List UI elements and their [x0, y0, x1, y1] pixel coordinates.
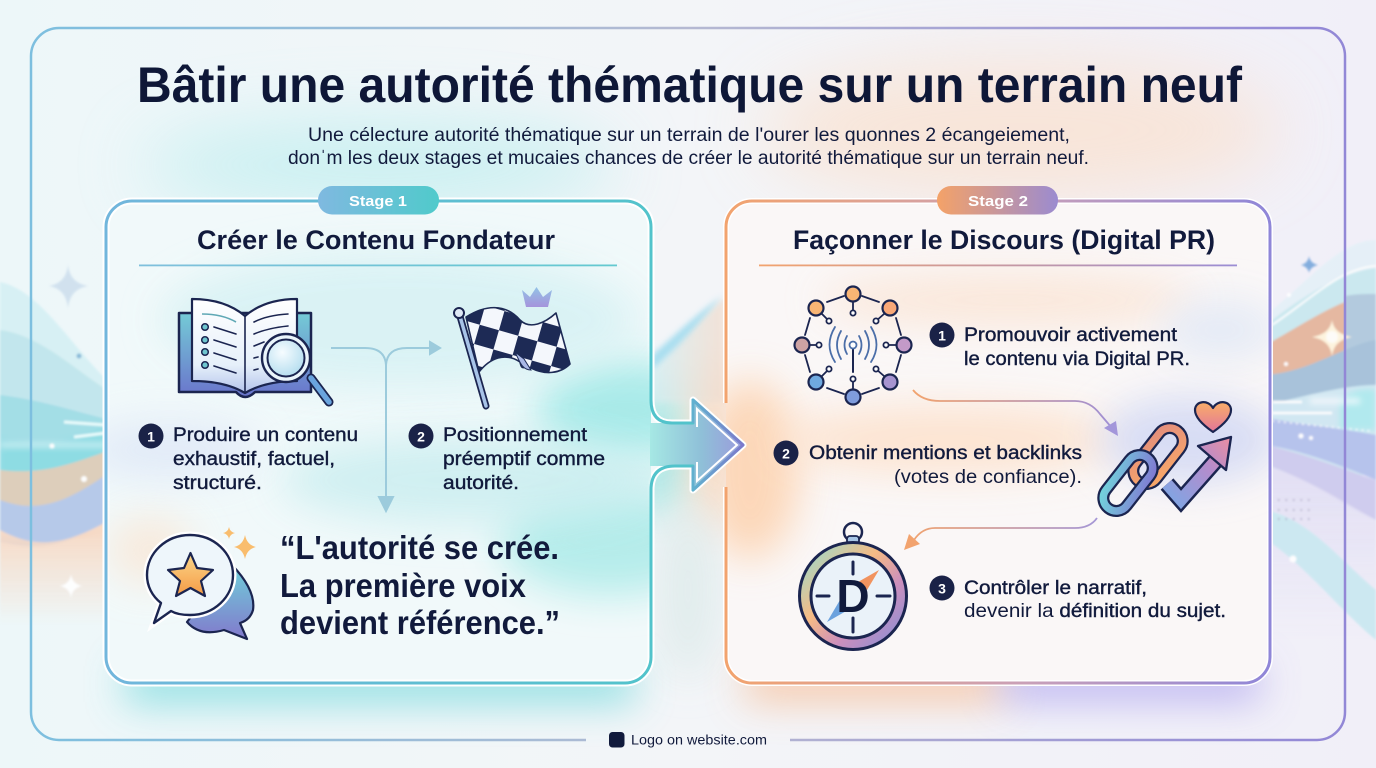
icon: crown — [522, 287, 552, 307]
badge: stage 1: Stage 1 — [349, 193, 407, 210]
step 1: produire: exhaustif, factuel, — [173, 448, 335, 470]
step 2: positionnement — [408, 424, 605, 494]
step 2: obtenir — [774, 440, 1082, 488]
step 2: obtenir: Obtenir mentions et backlinks — [809, 442, 1082, 464]
step 1: promouvoir: le contenu via Digital PR. — [964, 348, 1190, 370]
badge: stage 1 — [318, 186, 439, 214]
background waves left — [0, 265, 110, 625]
icon: right sparkles — [1301, 256, 1318, 273]
step 3: contrôler: devenir la définition du sujet. — [964, 600, 1226, 622]
quote: devient référence.” — [280, 604, 560, 641]
step 2: positionnement: autorité. — [443, 472, 519, 494]
arrow: links to compass — [904, 518, 1097, 550]
icon: compass — [800, 523, 906, 650]
title: Bâtir une autorité thématique sur un terrain neuf — [137, 57, 1242, 113]
step 3: contrôler — [930, 576, 1226, 622]
step 1: produire: Produire un contenu — [173, 424, 358, 446]
footer logo: Logo on website.com — [631, 732, 767, 748]
subtitle: Une célecture autorité thématique sur un terrain de l'ourer les quonnes 2 écangeiement, — [308, 125, 1070, 146]
step 2: obtenir: (votes de confiance). — [894, 466, 1082, 488]
step 3: contrôler: Contrôler le narratif, — [964, 577, 1147, 599]
icon: compass: D — [836, 570, 870, 622]
quote: “L'autorité se crée. — [280, 529, 559, 566]
step 1: promouvoir — [930, 322, 1190, 370]
step 3: contrôler: 3 — [938, 580, 946, 596]
icon: chain links, arrow and heart — [1098, 402, 1231, 516]
step 1: produire — [138, 424, 358, 494]
icon: left sparkle — [49, 265, 88, 308]
step 2: positionnement: Positionnement — [443, 424, 588, 446]
step 2: positionnement: préemptif comme — [443, 448, 605, 470]
panel glows — [125, 296, 1260, 703]
step 1: produire: structuré. — [173, 472, 262, 494]
icon: checkered flag — [454, 308, 570, 406]
quote: La première voix — [280, 567, 527, 604]
icon: speech bubbles with star — [147, 527, 256, 639]
step 2: obtenir: 2 — [782, 446, 790, 462]
icon: open book with magnifier — [179, 299, 329, 402]
heading: stage 1: Créer le Contenu Fondateur — [197, 225, 555, 255]
subtitle: donˈm les deux stages et mucaies chances de créer le autorité thématique sur un terrain neuf. — [288, 148, 1089, 169]
panel: stage 2 — [700, 201, 1280, 683]
step 1: promouvoir: Promouvoir activement — [964, 324, 1178, 346]
icon: signal network — [794, 286, 912, 404]
step 2: positionnement: 2 — [417, 428, 425, 444]
quote — [280, 529, 560, 641]
background waves right — [1266, 240, 1376, 640]
arrow: branching connector — [331, 342, 440, 511]
heading: stage 2: Façonner le Discours (Digital PR) — [793, 225, 1215, 255]
step 1: promouvoir: 1 — [938, 328, 946, 344]
subtitle — [288, 125, 1089, 169]
arrow: network to links — [913, 390, 1118, 436]
badge: stage 2: Stage 2 — [968, 193, 1028, 210]
panel: stage 1 — [80, 201, 743, 683]
badge: stage 2 — [937, 186, 1058, 214]
step 1: produire: 1 — [147, 428, 155, 444]
